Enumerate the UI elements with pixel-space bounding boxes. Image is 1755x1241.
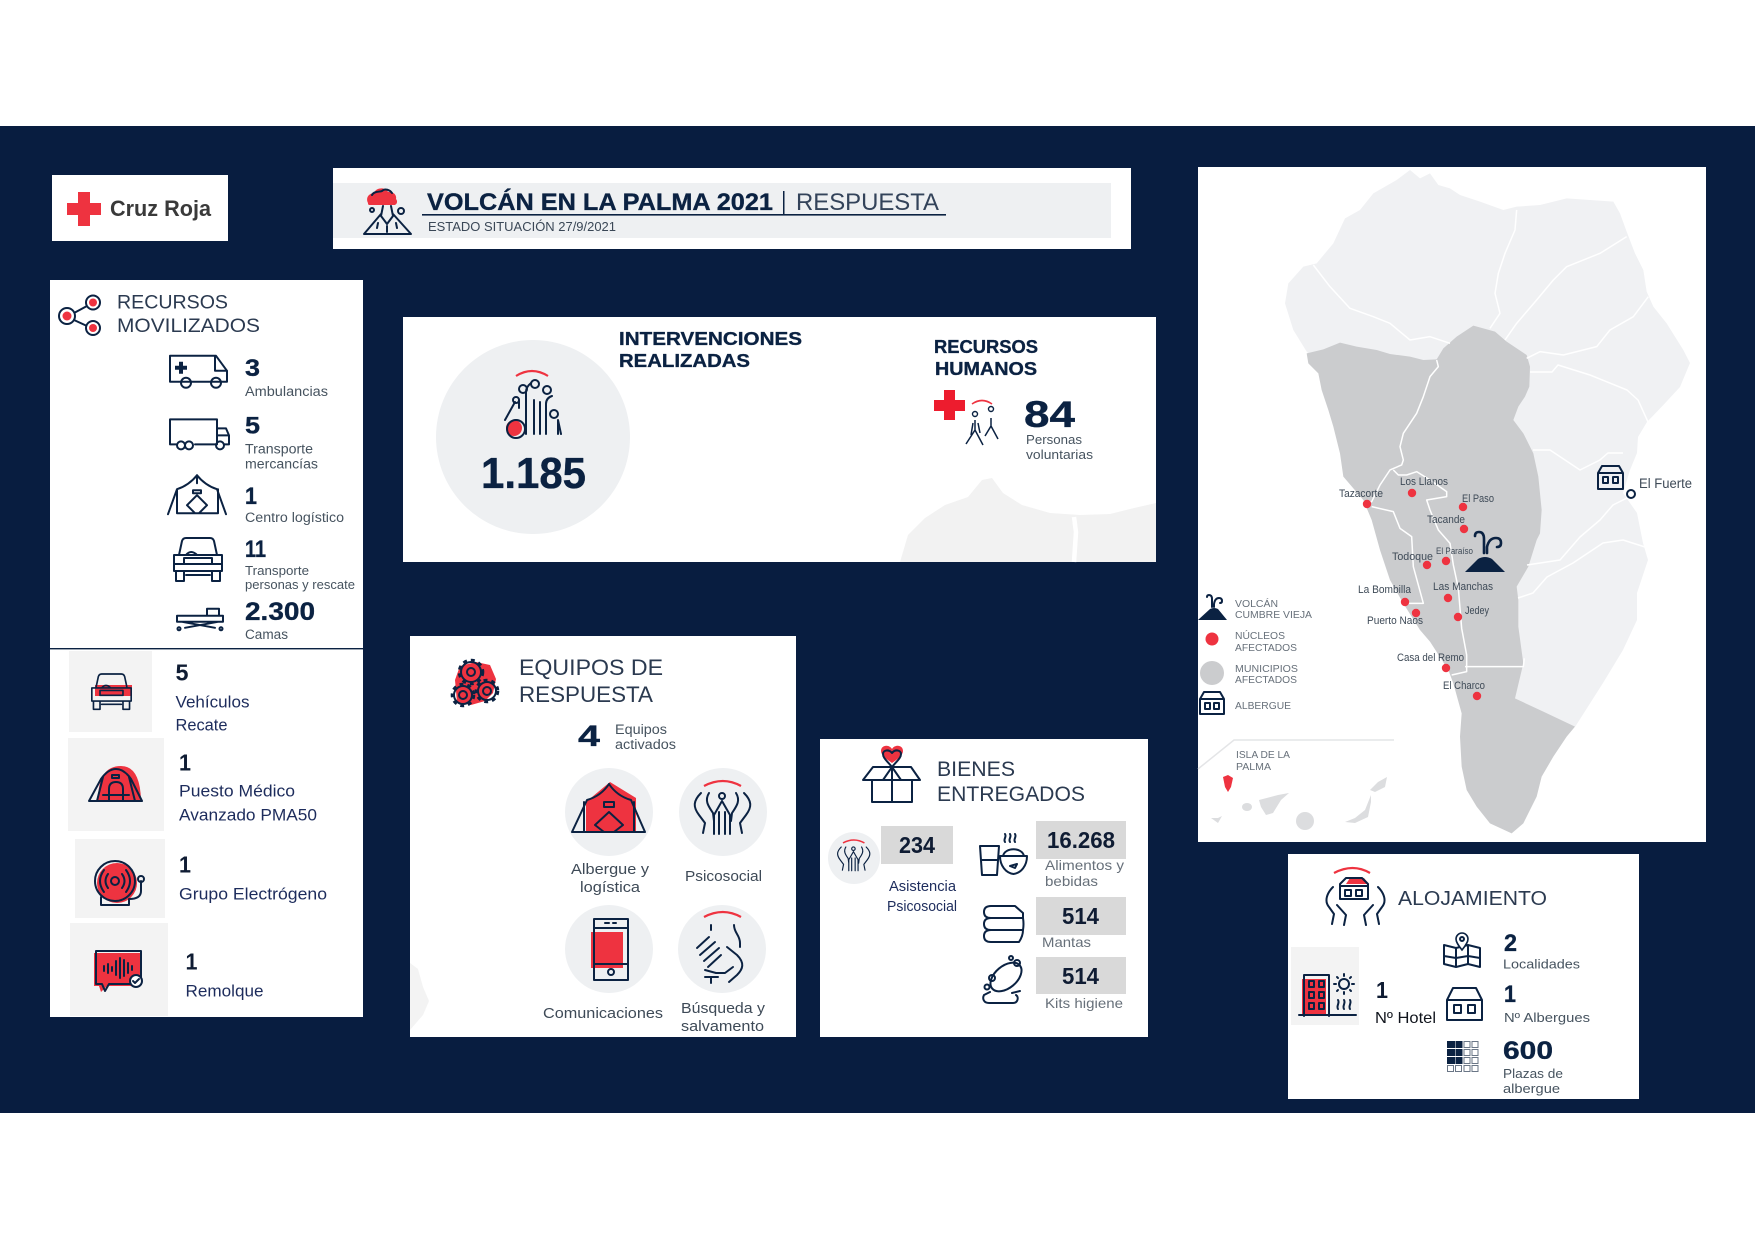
item: transporte personas y rescate: Transporte [245,563,309,578]
heading: recursos movilizados: MOVILIZADOS [117,316,260,337]
item: centro logístico [168,475,344,525]
stat: 84 personas voluntarias: voluntarias [1026,447,1094,462]
team: albergue y logística [565,768,653,896]
stat: 4 equipos activados: Equipos [615,722,667,737]
navy background band [0,126,1755,1113]
stat circle: intervenciones [436,340,630,534]
panel: intervenciones y recursos humanos [403,317,1156,562]
marker: albergue El Fuerte: El Fuerte [1639,476,1692,491]
heading: intervenciones realizadas [619,328,802,371]
inset: Canary Islands locator: ISLA DE LA [1236,750,1290,761]
icon: box with heart [863,746,920,802]
marker: albergue El Fuerte [1598,466,1692,498]
item: ambulancias [170,355,328,399]
item: vehículos rescate [69,651,250,734]
legend: NÚCLEOS [1235,629,1285,642]
heading: recursos movilizados [117,292,260,337]
team: psicosocial [679,768,767,885]
map: affected town markers: La Bombilla [1358,584,1412,596]
icon: network nodes [59,296,100,335]
stat: localidades: 2 [1504,930,1517,957]
item: remolque [70,923,264,1016]
legend: MUNICIPIOS [1235,664,1298,675]
item: transporte mercancías [170,412,318,471]
stat: mantas [984,897,1126,950]
map: affected town markers: Los Llanos [1400,476,1448,488]
title banner [333,168,1131,249]
team: albergue y logística: Albergue y [571,861,650,878]
stat: nº hotel: 1 [1376,977,1388,1003]
stat: kits higiene: 514 [1062,963,1099,989]
item: puesto médico avanzado: 1 [179,750,191,776]
panel: alojamiento [1288,854,1639,1099]
team: búsqueda y salvamento: Búsqueda y [681,1000,766,1017]
stat: plazas de albergue: Plazas de [1503,1066,1563,1081]
item: transporte personas y rescate: personas y rescate [245,577,355,592]
stat: 84 personas voluntarias [1024,394,1094,462]
team: búsqueda y salvamento [678,905,766,1035]
stat: 4 equipos activados: 4 [578,720,600,753]
stat: plazas de albergue: albergue [1503,1081,1560,1096]
heading text: RESPUESTA [796,189,939,216]
stat: plazas de albergue: 600 [1503,1037,1553,1065]
map: affected town markers: Jedey [1465,605,1489,617]
item: camas: Camas [245,627,288,642]
item: transporte personas y rescate: 11 [245,536,266,563]
stat: asistencia psicosocial [828,826,957,915]
item: remolque: Remolque [186,982,264,1000]
heading: equipos de respuesta: RESPUESTA [519,682,653,707]
logo: Cruz Roja: Cruz Roja [110,196,212,221]
map: affected town markers: Todoque [1392,551,1433,563]
icon: volcán on map [1465,532,1505,572]
stat: nº hotel [1291,947,1436,1027]
map: island municipalities [1285,170,1690,833]
stat: nº hotel: Nº Hotel [1375,1010,1436,1027]
map: affected town markers: Puerto Naos [1367,615,1423,627]
stat: mantas: 514 [1062,903,1099,929]
item: ambulancias: Ambulancias [245,384,328,399]
stat: nº albergues: Nº Albergues [1504,1010,1591,1025]
stat: 4 equipos activados [578,720,676,753]
item: vehículos rescate: Recate [176,716,228,734]
item: grupo electrógeno: 1 [179,852,191,878]
item: transporte mercancías: mercancías [245,456,318,471]
team: albergue y logística: logística [580,879,641,896]
panel: recursos movilizados [50,280,363,1017]
icon: gears [452,660,498,706]
map: affected town markers: Casa del Remo [1397,652,1464,664]
item: centro logístico: 1 [245,483,257,510]
map: affected town markers: Las Manchas [1433,581,1493,593]
stat: alimentos y bebidas [980,821,1126,889]
item: camas [177,598,315,642]
heading: bienes entregados [937,758,1085,806]
heading: recursos humanos: HUMANOS [935,359,1037,379]
heading: recursos movilizados: RECURSOS [117,292,228,314]
heading: recursos humanos: RECURSOS [934,337,1038,357]
stat: kits higiene: Kits higiene [1045,995,1123,1011]
stat: 4 equipos activados: activados [615,737,676,752]
panel: equipos de respuesta [410,636,796,1037]
legend: ALBERGUE [1235,701,1291,712]
map: affected town markers: Tacande [1427,514,1465,526]
item: camas: 2.300 [245,598,315,626]
item: puesto médico avanzado: Puesto Médico [179,782,295,800]
legend [1198,595,1312,714]
icon: erupting volcano [364,188,411,234]
stat: asistencia psicosocial: Asistencia [889,878,957,895]
map: affected town markers: El Charco [1443,680,1485,692]
stat: localidades: Localidades [1503,956,1581,972]
stat: localidades [1444,930,1581,972]
legend: VOLCÁN [1235,597,1278,610]
item: puesto médico avanzado: Avanzado PMA50 [179,806,317,824]
stat circle: intervenciones: 1.185 [481,449,586,498]
inset: Canary Islands locator [1198,740,1394,830]
heading: alojamiento: ALOJAMIENTO [1398,888,1547,910]
logo: Cruz Roja [52,175,228,241]
heading: recursos humanos [934,337,1038,379]
heading text: ESTADO SITUACIÓN 27/9/2021 [428,219,616,234]
item: vehículos rescate: Vehículos [176,692,250,712]
heading: bienes entregados: ENTREGADOS [937,783,1085,806]
item: puesto médico avanzado [68,738,317,831]
stat: alimentos y bebidas: 16.268 [1047,827,1115,853]
stat: alimentos y bebidas: bebidas [1045,873,1098,889]
team: búsqueda y salvamento: salvamento [681,1018,764,1035]
heading: equipos de respuesta [519,655,663,707]
stat: plazas de albergue [1447,1037,1563,1096]
inset: Canary Islands locator: PALMA [1236,762,1271,773]
item: centro logístico: Centro logístico [245,510,344,525]
icon: hands holding house [1326,868,1385,925]
item: ambulancias: 3 [245,355,260,382]
map: affected town markers: El Paraíso [1436,546,1473,556]
map: affected town markers: Tazacorte [1339,488,1383,500]
item: transporte mercancías: 5 [245,412,260,439]
team: comunicaciones [543,905,663,1022]
stat: kits higiene [983,956,1126,1011]
heading: intervenciones realizadas: INTERVENCIONES [619,328,802,349]
heading: bienes entregados: BIENES [937,758,1015,781]
stat: 84 personas voluntarias: Personas [1026,432,1083,447]
heading: intervenciones realizadas: REALIZADAS [619,350,750,371]
heading text [422,188,946,234]
team: psicosocial: Psicosocial [685,868,762,885]
item: transporte mercancías: Transporte [245,441,313,456]
panel: bienes entregados [820,739,1148,1037]
panel: mapa de La Palma [1198,167,1706,842]
map: affected town markers: El Paso [1462,493,1494,505]
stat: asistencia psicosocial: 234 [899,832,935,858]
stat: asistencia psicosocial: Psicosocial [887,898,957,915]
item: grupo electrógeno [75,839,327,918]
map: affected town markers [1339,476,1494,700]
item: vehículos rescate: 5 [176,660,189,686]
stat: nº albergues [1447,981,1591,1025]
team: comunicaciones: Comunicaciones [543,1005,663,1022]
icon: cruz y personas voluntarias [934,390,998,445]
stat: nº albergues: 1 [1504,981,1516,1008]
stat: 84 personas voluntarias: 84 [1024,394,1076,435]
legend: AFECTADOS [1235,643,1297,654]
legend: CUMBRE VIEJA [1235,610,1312,621]
item: grupo electrógeno: Grupo Electrógeno [179,884,327,904]
heading text: VOLCÁN EN LA PALMA 2021 [427,188,773,216]
item: remolque: 1 [186,948,198,974]
stat: mantas: Mantas [1042,934,1091,950]
stat: alimentos y bebidas: Alimentos y [1045,857,1124,873]
item: transporte personas y rescate [174,536,355,592]
heading: equipos de respuesta: EQUIPOS DE [519,655,663,680]
legend: AFECTADOS [1235,675,1297,686]
